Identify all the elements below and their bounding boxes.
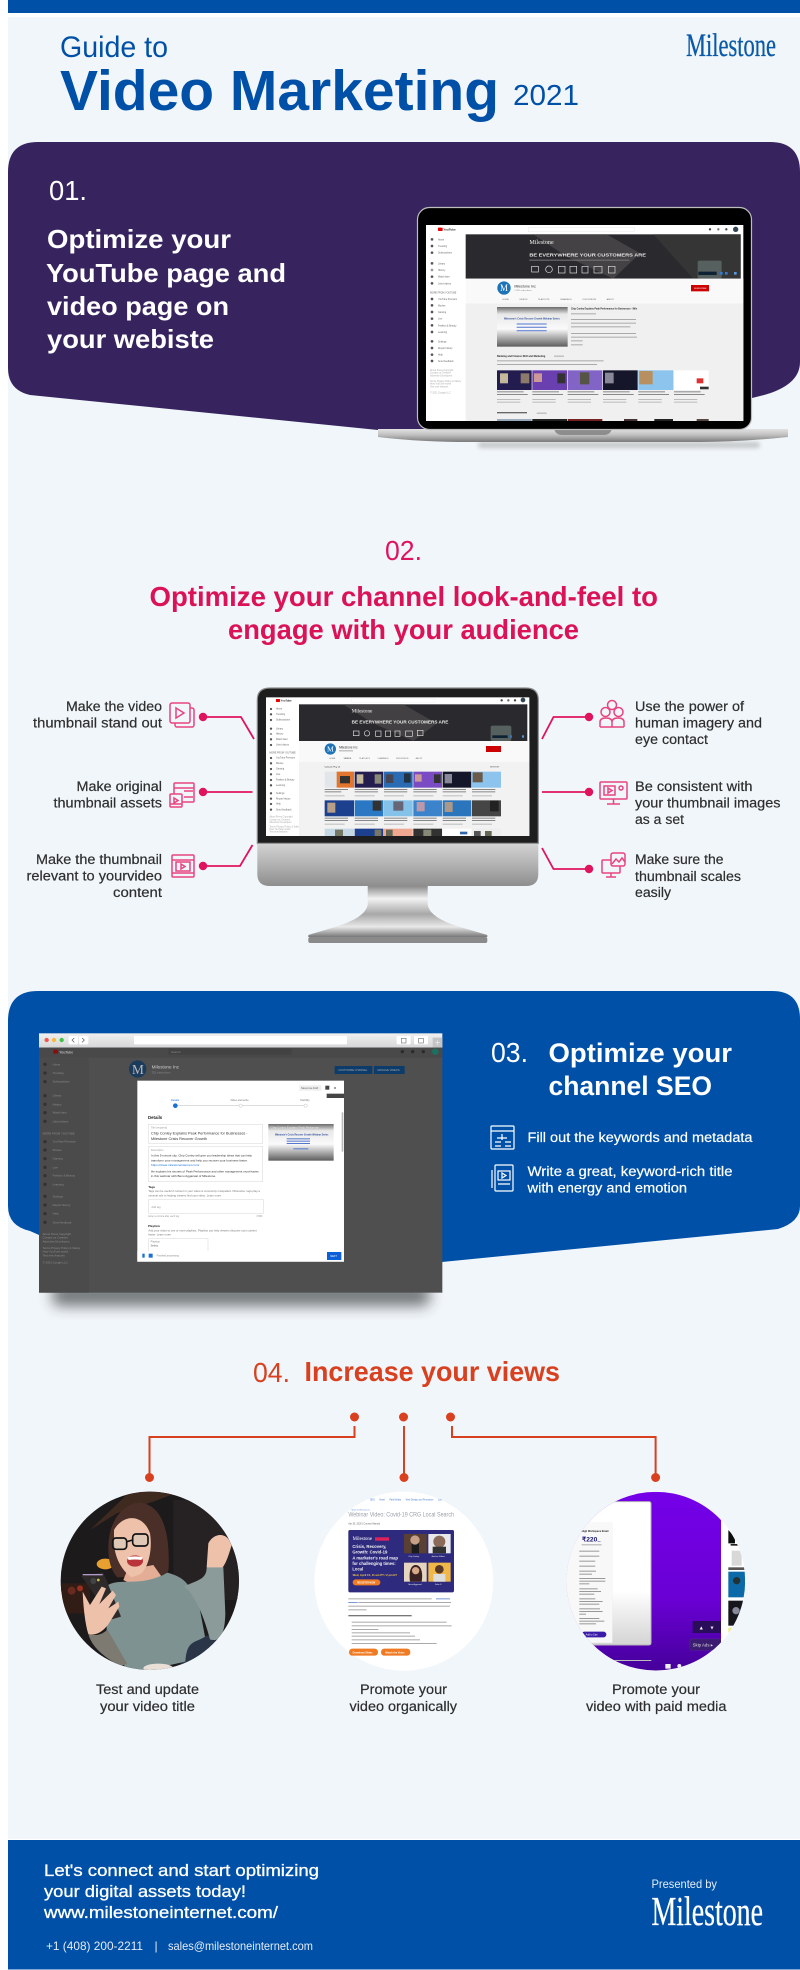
imac screen: youtube videos page: Liked videos <box>276 745 290 747</box>
imac screen: youtube videos page: Subscriptions <box>276 719 291 722</box>
connector: left bottom <box>199 845 252 870</box>
upload details dialog: Add tag <box>151 1205 161 1209</box>
caption: promote organically: video organically <box>350 1699 457 1714</box>
panel: section 03 <box>8 991 800 1262</box>
presented by: Presented by <box>652 1877 717 1891</box>
upload details dialog: minimal role in helping viewers find your video. Learn more <box>148 1194 222 1197</box>
laptop screen: youtube channel page: Settings <box>438 340 447 343</box>
photo: webinar page screenshot: SEO <box>370 1499 375 1501</box>
upload details dialog: Visibility <box>300 1098 310 1102</box>
label: make sure the thumbnail scales: thumbnail scales <box>635 869 741 884</box>
photo: paid video ad screenshot: ▼ <box>709 1625 715 1631</box>
laptop screen: youtube channel page: How YouTube works <box>430 383 452 386</box>
browser window mockup <box>39 1033 442 1293</box>
title: guide to: Guide to <box>60 31 168 64</box>
section heading: video page on <box>47 291 229 321</box>
imac foot edge <box>308 937 487 943</box>
upload details dialog: Saved as draft <box>301 1086 318 1090</box>
connector: right branch <box>446 1412 660 1482</box>
label: make original thumbnail assets <box>54 779 162 810</box>
icon: consistent set <box>600 782 627 804</box>
upload details dialog: Milestone Crisis Recover Growth <box>151 1137 207 1141</box>
laptop screen: youtube channel page: © 2021 Google LLC <box>430 391 451 394</box>
caption: test and update: your video title <box>100 1699 195 1714</box>
imac screen: youtube videos page: YouTube <box>281 699 292 703</box>
laptop screen: youtube channel page: Library <box>438 262 446 265</box>
laptop screen: youtube channel page: Subscriptions <box>438 252 453 255</box>
label: make the video thumbnail stand out: thumbnail stand out <box>33 716 162 730</box>
imac screen: youtube videos page: Milestone <box>352 708 373 714</box>
photo: webinar page screenshot: Growth: Covid-19 <box>352 1549 388 1554</box>
laptop screen: youtube channel page: Terms Privacy Policy & Safety <box>430 380 462 383</box>
section number 03: 03. <box>491 1037 528 1068</box>
photo: webinar page screenshot: REGISTER NOW <box>357 1582 376 1584</box>
dimmed youtube studio page <box>39 1048 442 1293</box>
label: make the video thumbnail stand out <box>33 699 162 730</box>
upload details dialog: Enter a comma after each tag <box>148 1215 180 1218</box>
icon: relevant thumbnail <box>172 855 194 877</box>
dimmed youtube studio page: Subscriptions <box>53 1080 70 1084</box>
photo: paid video ad screenshot <box>563 1490 748 1672</box>
call to action: www.milestoneinternet.com/ <box>43 1904 278 1922</box>
dimmed youtube studio page: Milestone Inc <box>152 1065 180 1070</box>
caption: promote with paid media <box>586 1682 727 1714</box>
upload details dialog: Details <box>171 1098 180 1102</box>
photo: webinar page screenshot: Benu Aggarwal <box>408 1583 422 1586</box>
caption: promote with paid media: video with paid media <box>586 1699 727 1714</box>
title: video marketing: Video Marketing <box>60 59 499 123</box>
photo: webinar page screenshot: Back to Resources <box>352 1509 370 1512</box>
dimmed youtube studio page: Movies <box>53 1148 62 1152</box>
imac screen: youtube videos page: DISCUSSION <box>396 758 409 760</box>
upload details dialog: 0/500 <box>257 1216 263 1218</box>
top band <box>8 0 800 13</box>
text: fill out the keywords: Fill out the keywords and metadata <box>528 1130 753 1145</box>
laptop screen: youtube channel page: SUBSCRIBE <box>694 288 707 290</box>
dimmed youtube studio page: Liked videos <box>53 1119 69 1123</box>
label: make the video thumbnail stand out: Make the video <box>66 699 162 714</box>
text: write a great title <box>526 1164 732 1196</box>
dimmed youtube studio page: Report history <box>53 1203 71 1207</box>
label: be consistent: your thumbnail images <box>635 796 781 810</box>
dimmed youtube studio page: Watch later <box>53 1111 67 1115</box>
photo: webinar page screenshot: Webinar Video: Covid-19 CRG Local Search <box>348 1513 454 1519</box>
label: be consistent <box>635 779 781 827</box>
upload details dialog: faster. Learn more <box>148 1234 172 1237</box>
laptop screen: youtube channel page: Report history <box>438 347 453 350</box>
laptop screen: youtube channel page: History <box>438 269 446 272</box>
photo: webinar page screenshot: for challenging times: <box>352 1561 396 1566</box>
laptop screen: youtube channel page: 1.35K subscribers <box>514 289 532 292</box>
section heading: Optimize your <box>47 224 231 254</box>
section title: Increase your views <box>304 1356 560 1387</box>
imac screen: youtube videos page: Milestone Inc <box>339 746 358 750</box>
laptop screen: youtube channel page: Watch later <box>438 276 450 279</box>
photo: webinar page screenshot: Milestone <box>353 1536 372 1542</box>
imac neck and foot <box>308 886 487 937</box>
imac screen: youtube videos page: Trending <box>276 713 286 716</box>
call to action <box>43 1862 319 1922</box>
dimmed youtube studio page: © 2021 Google LLC <box>43 1261 68 1265</box>
caption: promote organically <box>350 1682 457 1714</box>
imac screen: youtube videos page <box>266 697 529 836</box>
upload details dialog: Select <box>151 1244 158 1248</box>
photo: paid video ad screenshot: ₹220 <box>582 1535 598 1543</box>
laptop screen: youtube channel page: ABOUT <box>607 298 615 301</box>
upload details dialog: Title (required) <box>151 1127 167 1130</box>
header title block <box>60 31 579 123</box>
photo: webinar page screenshot: Sofia D <box>435 1584 442 1586</box>
laptop screen: youtube channel page: About Press Copyright <box>430 369 454 372</box>
imac screen: youtube videos page: Fashion & Beauty <box>276 779 295 782</box>
photo: webinar page screenshot: Loc <box>438 1499 443 1501</box>
photo: paid video ad screenshot: /mo <box>597 1541 602 1543</box>
contact details: +1 (408) 200-2211 <box>46 1939 143 1953</box>
laptop screen: youtube channel page: VIDEOS <box>519 299 528 301</box>
laptop screen: youtube channel page: Learning <box>438 331 448 334</box>
laptop screen: youtube channel page: YouTube <box>443 228 456 232</box>
dimmed youtube studio page: History <box>53 1102 62 1106</box>
dimmed youtube studio page: Advertise Developers <box>43 1239 70 1243</box>
laptop screen: youtube channel page <box>426 225 743 421</box>
section 02 heading <box>150 581 658 645</box>
laptop screen: youtube channel page: Milestone Inc <box>514 285 536 289</box>
imac screen: youtube videos page: Live <box>276 774 281 776</box>
photo: webinar page screenshot: Andrew Gilbert <box>432 1555 445 1558</box>
laptop base <box>378 429 788 442</box>
icon: keyword rich title <box>492 1165 513 1191</box>
dimmed youtube studio page: 355 subscribers <box>152 1071 171 1075</box>
icon: keywords and metadata <box>491 1126 514 1149</box>
imac screen: youtube videos page: Test new features <box>269 831 288 834</box>
connector: left branch <box>145 1412 359 1482</box>
upload details dialog: In this 5-minute clip, Chip Conley will give you leadership ideas that can help <box>151 1154 252 1158</box>
title: year: 2021 <box>513 80 579 112</box>
dimmed youtube studio page: About Press Copyright <box>43 1232 71 1236</box>
icon: thumbnail assets <box>170 783 194 807</box>
photo: paid video ad screenshot: High Workspace Email <box>582 1530 609 1533</box>
photo: webinar page screenshot: A marketer's road map <box>352 1555 398 1560</box>
dimmed youtube studio page: Library <box>53 1094 62 1098</box>
imac mockup <box>257 688 538 943</box>
laptop screen: youtube channel page: HOME <box>502 299 509 301</box>
laptop screen: youtube channel page: Test new features <box>430 385 449 388</box>
imac screen: youtube videos page: Help <box>276 804 281 806</box>
imac screen: youtube videos page: PLAYLISTS <box>359 757 370 760</box>
upload details dialog: Playlists <box>151 1241 161 1244</box>
dimmed youtube studio page: MANAGE VIDEOS <box>377 1068 400 1072</box>
imac screen: youtube videos page: M <box>327 745 334 754</box>
panel: section 01 <box>8 142 800 440</box>
contact details: | <box>154 1939 158 1953</box>
laptop screen: youtube channel page: Gaming <box>438 312 447 314</box>
label: make original thumbnail assets: thumbnail assets <box>54 796 162 810</box>
photo: webinar page screenshot: Crisis, Recovery, <box>352 1544 386 1549</box>
section number 01: 01. <box>49 175 87 206</box>
label: use the power of human imagery <box>635 699 762 747</box>
laptop screen: youtube channel page: CHANNELS <box>560 298 572 301</box>
photo: webinar page screenshot: Chip Conley <box>408 1556 419 1558</box>
contact details <box>46 1939 313 1953</box>
imac screen: youtube videos page: Home <box>276 709 283 711</box>
upload details dialog: Tags <box>148 1185 155 1189</box>
text: write a great title: with energy and emotion <box>526 1180 687 1196</box>
imac screen: youtube videos page: Settings <box>276 792 285 795</box>
photo: woman excited looking at phone <box>60 1490 240 1673</box>
connector: right bottom <box>542 848 593 873</box>
laptop bezel <box>418 208 752 430</box>
imac bezel <box>257 688 538 843</box>
photo: paid video ad screenshot: Add to Cart <box>586 1634 598 1637</box>
upload details dialog: Playlists <box>148 1224 160 1228</box>
upload details dialog: Tags can be useful if content in your video is commonly misspelled. Otherwise, tags play a <box>148 1190 261 1193</box>
icon: video thumbnail <box>170 703 194 727</box>
label: make the thumbnail relevant: relevant to yourvideo <box>26 868 162 884</box>
icon: human imagery <box>600 700 624 727</box>
upload details dialog: He explains his secrets of Peak Performance and other management must-haves <box>151 1169 259 1173</box>
section number 04: 04. <box>253 1357 290 1388</box>
dimmed youtube studio page: Fashion & Beauty <box>53 1174 76 1178</box>
laptop screen: youtube channel page: Help <box>438 355 443 357</box>
section heading: Optimize your <box>548 1038 732 1068</box>
laptop screen: youtube channel page: Advertise Developers <box>430 374 453 377</box>
text: write a great title: Write a great, keyword-rich title <box>528 1164 732 1179</box>
imac screen: youtube videos page: CHANNELS <box>378 757 389 760</box>
laptop screen: youtube channel page: Contact us Creators <box>430 372 452 375</box>
section heading: YouTube page and <box>46 258 286 288</box>
laptop screen: youtube channel page: YouTube Premium <box>438 298 457 301</box>
dimmed youtube studio page: Contact us Creators <box>43 1236 68 1240</box>
label: be consistent: Be consistent with <box>635 779 752 794</box>
imac screen: youtube videos page: ABOUT <box>416 757 423 760</box>
contact details: sales@milestoneinternet.com <box>168 1939 313 1953</box>
dimmed youtube studio page: How YouTube works <box>43 1250 69 1254</box>
connector: right middle <box>542 788 593 796</box>
section heading: your webiste <box>47 324 214 354</box>
section 04 heading <box>253 1356 560 1388</box>
photo: paid video ad screenshot: ▲ <box>699 1625 704 1631</box>
panel background: purple <box>8 142 800 440</box>
label: make sure the thumbnail scales <box>635 852 741 900</box>
upload details dialog: × <box>334 1086 337 1091</box>
laptop shadow <box>478 442 760 448</box>
laptop screen: youtube channel page: Home <box>438 239 445 241</box>
dimmed youtube studio page: Home <box>53 1062 61 1066</box>
dimmed youtube studio page: M <box>132 1062 144 1077</box>
label: use the power of human imagery: human imagery and <box>635 716 762 730</box>
laptop screen: youtube channel page: PLAYLISTS <box>538 298 550 301</box>
dimmed youtube studio page: YouTube Premium <box>53 1140 77 1144</box>
laptop screen: youtube channel page: Milestone's Crisis Recover Growth Webinar Series <box>504 317 560 320</box>
imac screen: youtube videos page: How YouTube works <box>269 828 291 831</box>
laptop screen: youtube channel page: BE EVERYWHERE YOUR CUSTOMERS ARE <box>529 253 647 259</box>
laptop screen: youtube channel page: DISCUSSION <box>583 299 597 301</box>
photo: webinar page screenshot: Hotel <box>379 1498 385 1501</box>
upload details dialog: Chip Conley Explains Peak Performan <box>271 1126 320 1129</box>
upload details dialog: transform your management and help you recover your business faster. <box>151 1158 248 1162</box>
label: make sure the thumbnail scales: easily <box>635 885 671 900</box>
caption: promote with paid media: Promote your <box>612 1682 701 1697</box>
dimmed youtube studio page: Send feedback <box>53 1220 72 1224</box>
caption: promote organically: Promote your <box>360 1682 448 1697</box>
imac screen: youtube videos page: Contact us Creators <box>269 818 291 821</box>
label: use the power of human imagery: Use the power of <box>635 699 744 714</box>
label: make original thumbnail assets: Make original <box>76 779 162 794</box>
caption: test and update <box>96 1682 199 1714</box>
connector: right top <box>542 713 593 739</box>
imac screen: youtube videos page: BE EVERYWHERE YOUR CUSTOMERS ARE <box>352 719 448 724</box>
photo: webinar page screenshot <box>314 1492 493 1671</box>
photo: webinar page screenshot: Local <box>352 1567 363 1572</box>
dimmed youtube studio page: CUSTOMIZE CHANNEL <box>338 1068 368 1072</box>
dimmed youtube studio page: Terms Privacy Policy & Safety <box>43 1246 81 1250</box>
laptop screen: youtube channel page: Milestone <box>529 239 554 246</box>
laptop mockup <box>378 208 788 448</box>
imac screen: youtube videos page: History <box>276 733 284 736</box>
imac screen: youtube videos page: VIDEOS <box>344 758 352 760</box>
laptop screen: youtube channel page: M <box>500 283 508 293</box>
label: be consistent: as a set <box>635 812 684 827</box>
imac screen: youtube videos page: Report history <box>276 797 291 800</box>
dimmed youtube studio page: Live <box>53 1165 58 1169</box>
section 02 heading: engage with your audience <box>228 614 579 645</box>
imac screen: youtube videos page: Watch later <box>276 738 288 741</box>
laptop notch <box>554 429 612 435</box>
dimmed youtube studio page: MORE FROM YOUTUBE <box>43 1132 75 1136</box>
upload details dialog: Video elements <box>230 1098 249 1102</box>
laptop screen: youtube channel page: Movies <box>438 305 446 307</box>
photo: webinar page screenshot: Wed, April 15, 11 am PT / 2 pm ET <box>353 1574 398 1577</box>
imac screen: youtube videos page: Uploads Play all <box>325 767 341 769</box>
photo: webinar page screenshot: Apr 30, 2020 | Country Manual <box>348 1523 380 1526</box>
section heading: channel SEO <box>548 1071 712 1101</box>
dimmed youtube studio page: YouTube <box>59 1050 73 1054</box>
browser toolbar <box>39 1033 442 1048</box>
imac chin <box>257 843 538 886</box>
connector: middle branch <box>399 1412 408 1482</box>
panel background: blue <box>8 991 800 1262</box>
upload details dialog: NEXT <box>330 1255 337 1258</box>
imac screen: youtube videos page: Gaming <box>276 769 285 771</box>
imac screen: youtube videos page: About Press Copyright <box>269 816 293 819</box>
laptop screen: youtube channel page: Live <box>438 319 443 321</box>
photo: webinar page screenshot: Web Design and Promotion <box>406 1498 434 1501</box>
upload details dialog: https://www.milestoneinternet.com/ <box>151 1163 199 1167</box>
dimmed youtube studio page: Settings <box>53 1194 63 1198</box>
caption: test and update: Test and update <box>96 1682 199 1697</box>
section 02 number: 02. <box>385 535 422 566</box>
section 02 heading: Optimize your channel look-and-feel to <box>150 581 658 612</box>
upload details dialog: Milestone's Crisis Recover Growth Webinar Series <box>275 1133 329 1136</box>
connector: left top <box>199 713 254 739</box>
imac screen: youtube videos page: MORE FROM YOUTUBE <box>269 752 296 754</box>
imac screen: youtube videos page: Learning <box>276 784 286 787</box>
upload details dialog: in this webinar with Benu Aggarwal of Milestone. <box>151 1174 216 1178</box>
laptop screen: youtube channel page: Fashion & Beauty <box>438 324 457 327</box>
connector: left middle <box>199 788 252 796</box>
dimmed youtube studio page: Learning <box>53 1182 64 1186</box>
photo: webinar page screenshot: Watch the Video <box>385 1651 405 1654</box>
section heading <box>46 224 286 354</box>
dimmed youtube studio page: Help <box>53 1212 59 1216</box>
label: make the thumbnail relevant <box>26 852 162 900</box>
imac screen: youtube videos page: YouTube Premium <box>276 757 295 760</box>
section heading <box>548 1038 732 1101</box>
upload details dialog: Add your video to one or more playlists. Playlists can help viewers discover your content <box>148 1229 257 1232</box>
imac screen: youtube videos page: Movies <box>276 763 284 765</box>
laptop screen: youtube channel page: MORE FROM YOUTUBE <box>430 293 457 295</box>
upload details dialog: Finished processing <box>157 1255 179 1258</box>
dimmed youtube studio page: Search <box>171 1050 181 1054</box>
label: make sure the thumbnail scales: Make sure the <box>635 852 724 867</box>
photo: webinar page screenshot: Download Slides <box>353 1651 373 1654</box>
photo: webinar page screenshot: Paid Media <box>389 1499 402 1501</box>
imac screen: youtube videos page: Send feedback <box>276 809 292 811</box>
imac screen: youtube videos page: Advertise Developers <box>269 821 292 824</box>
label: make the thumbnail relevant: content <box>113 885 162 900</box>
laptop screen: youtube channel page: Chip Conley Explains Peak Performance for Businesses - Mile <box>571 307 638 310</box>
dimmed youtube studio page: Test new features <box>43 1253 65 1257</box>
browser window shadow <box>52 1284 430 1306</box>
call to action: your digital assets today! <box>44 1883 246 1901</box>
panel: footer <box>8 1840 800 1970</box>
icon: scalable thumbnail <box>602 853 625 877</box>
dimmed youtube studio page: Trending <box>53 1071 64 1075</box>
dimmed youtube studio page: Gaming <box>53 1157 63 1161</box>
imac screen: youtube videos page: Library <box>276 727 284 730</box>
photo: paid video ad screenshot: Skip Ads ▸ <box>693 1642 713 1647</box>
imac screen: youtube videos page: HOME <box>329 758 336 760</box>
label: make the thumbnail relevant: Make the thumbnail <box>36 852 162 867</box>
laptop screen: youtube channel page: Trending <box>438 245 448 248</box>
footer background <box>8 1840 800 1970</box>
imac screen: youtube videos page: SORT BY <box>490 767 500 769</box>
laptop screen: youtube channel page: Send feedback <box>438 361 454 363</box>
upload details dialog: Chip Conley Explains Peak Performance for Businesses - <box>151 1132 248 1136</box>
upload details dialog: Description <box>151 1149 164 1152</box>
label: use the power of human imagery: eye contact <box>635 732 708 747</box>
laptop screen: youtube channel page: Banking and Finance SEO and Marketing <box>497 355 546 358</box>
laptop screen: youtube channel page: Liked videos <box>438 283 452 285</box>
upload details dialog: Details <box>148 1115 163 1120</box>
call to action: Let's connect and start optimizing <box>44 1862 319 1880</box>
upload details dialog <box>137 1081 344 1262</box>
imac screen: youtube videos page: Terms Privacy Policy & Safety <box>269 825 301 828</box>
